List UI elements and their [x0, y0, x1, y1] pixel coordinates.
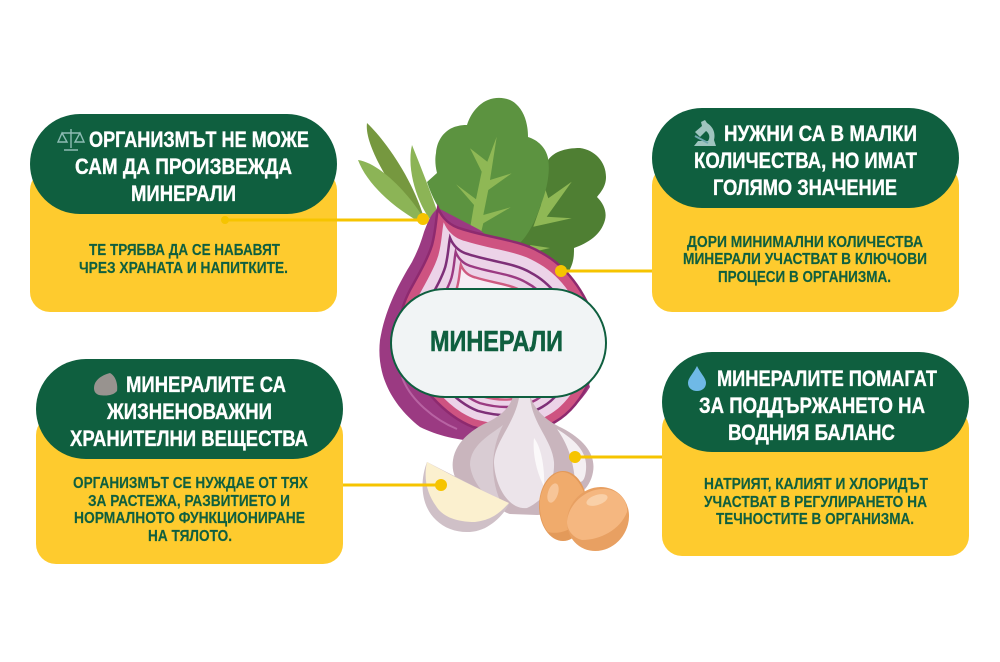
body text: ЗА РАСТЕЖА, РАЗВИТИЕТО И	[88, 493, 290, 510]
icon: onion cut rings	[400, 208, 598, 433]
icon: water drop	[688, 366, 706, 391]
icon: garlic bulb	[453, 396, 593, 515]
icon: front grass blade	[410, 145, 438, 222]
yellow body panel	[652, 165, 959, 312]
icon: rock	[94, 373, 117, 396]
icon: main leaf vein	[456, 137, 512, 234]
body text: ТЕ ТРЯБВА ДА СЕ НАБАВЯТ	[89, 242, 280, 259]
card: minerals are vital nutrients	[36, 359, 343, 564]
central illustration: onion, greens, garlic and eggs	[358, 98, 642, 563]
icon: right leaf vein	[530, 182, 572, 252]
card: minerals support water balance	[662, 352, 969, 556]
green heading pill	[30, 114, 337, 214]
heading text: ОРГАНИЗМЪТ НЕ МОЖЕ	[89, 127, 309, 152]
heading text: МИНЕРАЛИТЕ ПОМАГАТ	[717, 366, 937, 391]
yellow body panel	[36, 415, 343, 564]
card: small quantities, great importance	[652, 108, 959, 312]
heading text: ХРАНИТЕЛНИ ВЕЩЕСТВА	[70, 426, 308, 451]
central title pill: МИНЕРАЛИ	[430, 326, 563, 358]
body text: МИНЕРАЛИ УЧАСТВАТ В КЛЮЧОВИ	[683, 251, 927, 268]
card: organism cannot produce minerals	[30, 114, 337, 312]
green heading pill	[36, 359, 343, 459]
heading text	[699, 366, 937, 445]
heading text: САМ ДА ПРОИЗВЕЖДА	[75, 154, 292, 179]
green heading pill	[662, 352, 969, 452]
heading text	[75, 127, 309, 206]
body text: ПРОЦЕСИ В ОРГАНИЗМА.	[718, 269, 891, 286]
icon: microscope	[694, 120, 716, 146]
yellow body panel	[30, 170, 337, 312]
heading text: КОЛИЧЕСТВА, НО ИМАТ	[694, 148, 917, 173]
heading text: МИНЕРАЛИ	[131, 181, 236, 206]
body text: УЧАСТВАТ В РЕГУЛИРАНЕТО НА	[704, 494, 927, 511]
icon: dark back leaf	[517, 148, 606, 274]
heading text: МИНЕРАЛИТЕ СА	[126, 372, 286, 397]
icon: scales	[58, 129, 84, 150]
heading text	[70, 372, 308, 451]
icon: main leaf	[427, 98, 549, 243]
connector: bottom right card to garlic	[569, 451, 662, 463]
heading text: НУЖНИ СА В МАЛКИ	[724, 121, 917, 146]
body text: ЧРЕЗ ХРАНАТА И НАПИТКИТЕ.	[79, 260, 288, 277]
body text	[73, 475, 308, 545]
body text	[683, 234, 927, 286]
yellow body panel	[662, 408, 969, 556]
body text: ДОРИ МИНИМАЛНИ КОЛИЧЕСТВА	[687, 234, 923, 251]
body text: НОРМАЛНОТО ФУНКЦИОНИРАНЕ	[74, 510, 305, 527]
connector: top right card to onion	[555, 265, 652, 277]
connector: bottom left card to clove	[343, 479, 447, 491]
heading text: ЗА ПОДДЪРЖАНЕТО НА	[699, 393, 925, 418]
heading text: ГОЛЯМО ЗНАЧЕНИЕ	[713, 175, 897, 200]
body text: ТЕЧНОСТИТЕ В ОРГАНИЗМА.	[716, 511, 914, 528]
connector: top left card to onion	[221, 213, 429, 225]
central title pill	[391, 289, 606, 397]
heading text: ВОДНИЯ БАЛАНС	[728, 420, 895, 445]
icon: onion skin highlight	[402, 377, 457, 429]
heading text: ЖИЗНЕНОВАЖНИ	[106, 399, 272, 424]
body text	[704, 476, 928, 528]
body text: НА ТЯЛОТО.	[148, 528, 232, 545]
heading text	[694, 121, 917, 200]
green heading pill	[652, 108, 959, 208]
icon: grass blades	[358, 123, 424, 223]
icon: garlic clove	[423, 462, 509, 532]
body text: НАТРИЯТ, КАЛИЯТ И ХЛОРИДЪТ	[704, 476, 928, 493]
icon: onion outer skin	[379, 208, 590, 441]
body text	[79, 242, 288, 277]
body text: ОРГАНИЗМЪТ СЕ НУЖДАЕ ОТ ТЯХ	[73, 475, 308, 492]
icon: eggs	[539, 471, 642, 563]
